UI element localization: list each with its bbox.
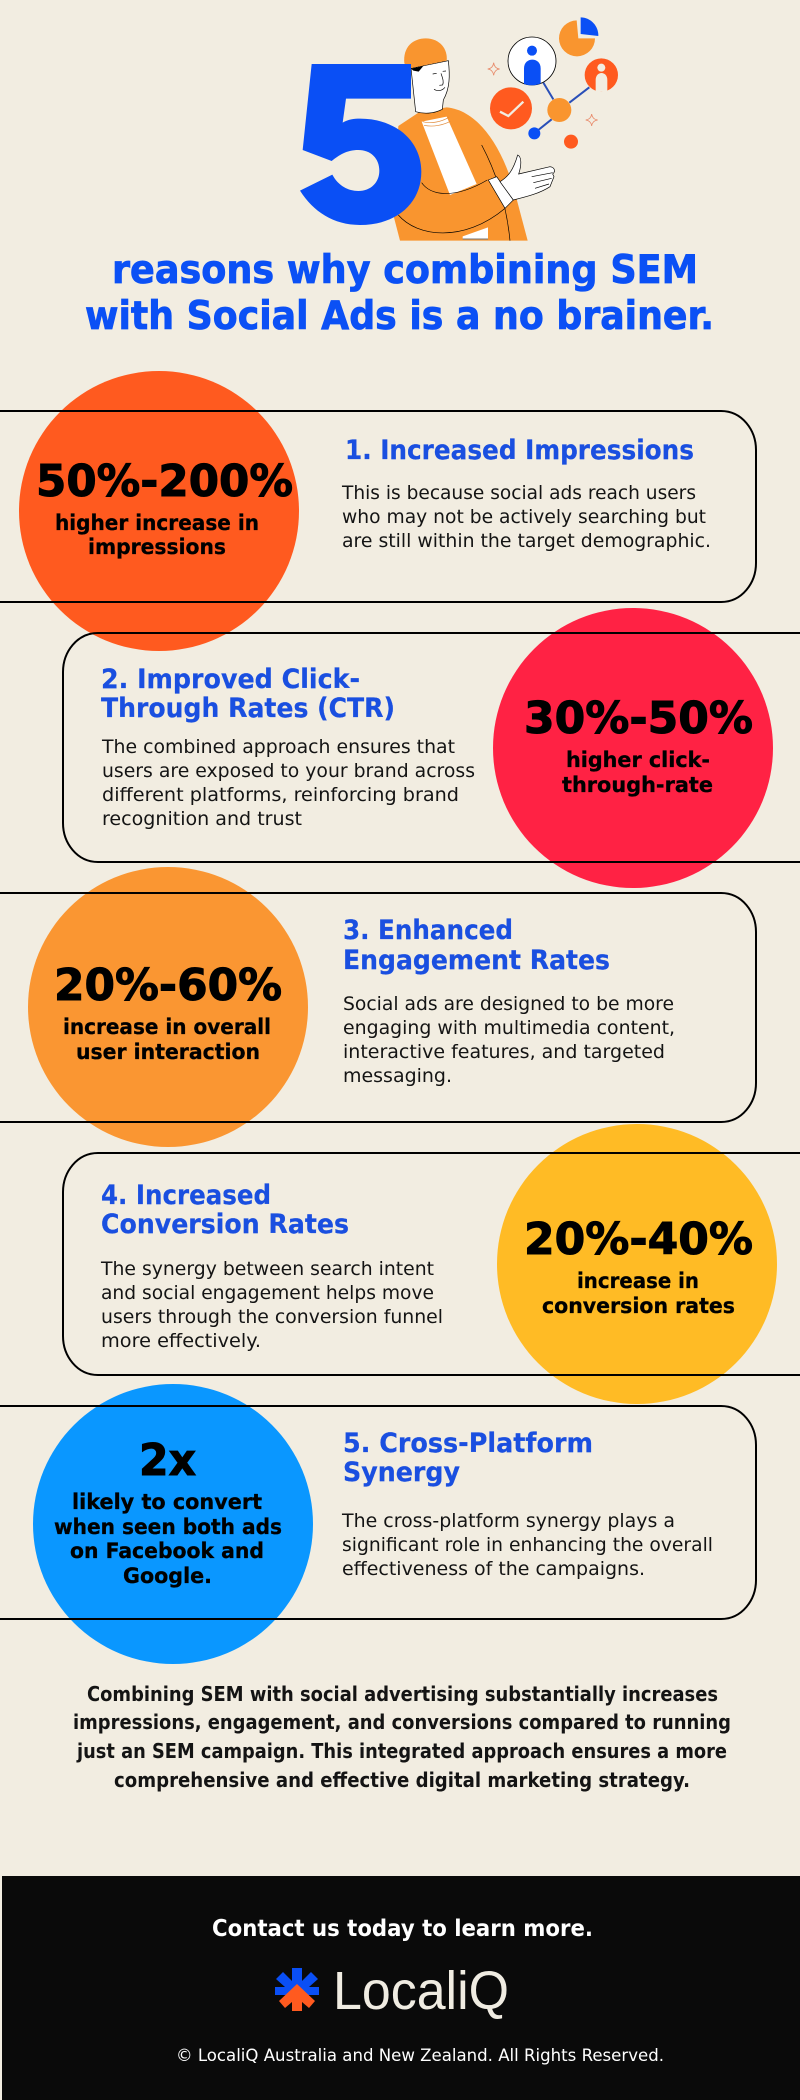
stat caption 5: on Facebook and [70, 1539, 264, 1563]
stat caption 3 [63, 1015, 271, 1064]
card outline 1 [0, 411, 756, 602]
heading 3: Engagement Rates [343, 945, 610, 976]
stat 20%-40%: 20%-40% [524, 1214, 753, 1265]
body 3: interactive features, and targeted [343, 1041, 665, 1063]
body 1: This is because social ads reach users [341, 482, 696, 504]
conclusion text: impressions, engagement, and conversions compared to running [73, 1710, 731, 1734]
stat circle 3 [28, 867, 308, 1147]
panel: increased impressions [0, 371, 756, 651]
heading 4: 4. Increased [101, 1180, 271, 1211]
heading 2 [101, 664, 395, 724]
title: with Social Ads is a no brainer. [85, 294, 714, 339]
icon: logo asterisk [275, 1968, 319, 2011]
stat circle 2 [493, 608, 773, 888]
panel: enhanced engagement rates [0, 867, 756, 1147]
body 2 [101, 736, 475, 830]
hero illustration [300, 17, 618, 241]
heading 2: 2. Improved Click- [101, 664, 360, 695]
stat 2x: 2x [139, 1435, 196, 1486]
stat caption 5: Google. [123, 1564, 212, 1588]
body 5: significant role in enhancing the overall [342, 1534, 713, 1556]
stat caption 3: increase in overall [63, 1015, 271, 1039]
heading 1: 1. Increased Impressions [345, 435, 694, 466]
big number 5 [300, 64, 421, 225]
panel: increased conversion rates [63, 1124, 800, 1404]
stat 20%-60%: 20%-60% [54, 960, 282, 1011]
body 4: more effectively. [101, 1330, 261, 1352]
heading 5: Synergy [343, 1457, 460, 1488]
stat caption 1 [55, 511, 259, 559]
body 4: The synergy between search intent [100, 1258, 434, 1280]
body 2: The combined approach ensures that [101, 736, 455, 758]
panel: improved click-through rates [63, 608, 800, 888]
stat caption 4 [542, 1269, 735, 1318]
stat circle 1 [19, 371, 299, 651]
stat caption 4: conversion rates [542, 1294, 735, 1318]
stat circle 5 [33, 1384, 313, 1664]
body 4 [100, 1258, 443, 1352]
body 2: different platforms, reinforcing brand [102, 784, 459, 806]
heading 5 [343, 1428, 593, 1488]
heading 3 [343, 915, 610, 976]
stat caption 5 [54, 1490, 282, 1588]
stat caption 1: impressions [88, 535, 226, 559]
stat caption 2 [562, 748, 713, 797]
stat caption 3: user interaction [76, 1040, 260, 1064]
body 3: messaging. [343, 1065, 452, 1087]
heading 5: 5. Cross-Platform [343, 1428, 593, 1459]
person [393, 38, 554, 241]
heading 4 [101, 1180, 349, 1240]
body 2: users are exposed to your brand across [102, 760, 475, 782]
logo wordmark: LocaliQ [333, 1961, 509, 2021]
title [85, 248, 714, 339]
heading 3: 3. Enhanced [343, 915, 513, 946]
conclusion text: Combining SEM with social advertising substantially increases [87, 1682, 718, 1706]
body 1: are still within the target demographic. [342, 530, 711, 552]
panel: cross-platform synergy [0, 1384, 756, 1664]
stat 50%-200%: 50%-200% [36, 456, 293, 507]
LocaliQ logo [275, 1961, 509, 2021]
stat circle 4 [497, 1124, 777, 1404]
body 3 [343, 993, 675, 1087]
body 3: Social ads are designed to be more [343, 993, 674, 1015]
card outline 3 [0, 893, 756, 1122]
heading 2: Through Rates (CTR) [101, 693, 395, 724]
stat caption 2: higher click- [566, 748, 710, 772]
body 1 [341, 482, 711, 552]
stat caption 1: higher increase in [55, 511, 259, 535]
body 4: users through the conversion funnel [101, 1306, 443, 1328]
card outline 2 [63, 633, 800, 862]
stat 30%-50%: 30%-50% [524, 693, 753, 744]
conclusion text [73, 1682, 731, 1792]
network graphic [488, 17, 618, 149]
body 1: who may not be actively searching but [342, 506, 706, 528]
heading 4: Conversion Rates [101, 1209, 349, 1240]
conclusion text: just an SEM campaign. This integrated approach ensures a more [76, 1739, 727, 1763]
stat caption 4: increase in [577, 1269, 699, 1293]
body 4: and social engagement helps move [101, 1282, 434, 1304]
body 5: The cross-platform synergy plays a [341, 1510, 675, 1532]
body 5: effectiveness of the campaigns. [342, 1558, 645, 1580]
title: reasons why combining SEM [112, 248, 698, 293]
stat caption 5: likely to convert [72, 1490, 262, 1514]
body 5 [341, 1510, 713, 1580]
conclusion text: comprehensive and effective digital marketing strategy. [114, 1768, 690, 1792]
stat caption 5: when seen both ads [54, 1515, 282, 1539]
copyright: © LocaliQ Australia and New Zealand. All Rights Reserved. [176, 2046, 664, 2065]
body 3: engaging with multimedia content, [343, 1017, 675, 1039]
card outline 4 [63, 1153, 800, 1375]
footer band [2, 1876, 800, 2100]
body 2: recognition and trust [102, 808, 302, 830]
card outline 5 [0, 1406, 756, 1619]
stat caption 2: through-rate [562, 773, 713, 797]
contact line: Contact us today to learn more. [212, 1916, 593, 1942]
